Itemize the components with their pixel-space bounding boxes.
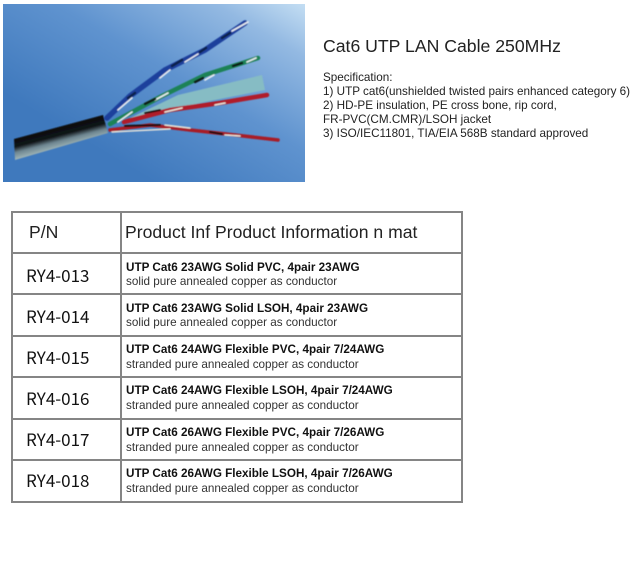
red pair upper: [124, 95, 267, 122]
row: RY4-016: UTP Cat6 24AWG Flexible LSOH, 4pair 7/24AWG: [126, 384, 393, 397]
row: RY4-014: solid pure annealed copper as conductor: [126, 316, 337, 329]
row: RY4-018: stranded pure annealed copper as conductor: [126, 482, 359, 495]
row: RY4-013: UTP Cat6 23AWG Solid PVC, 4pair 23AWG: [126, 261, 360, 274]
red pair lower: [110, 125, 278, 140]
specification text: 1) UTP cat6(unshielded twisted pairs enhanced category 6): [323, 85, 630, 98]
row: RY4-016: [26, 384, 393, 412]
row: RY4-018: UTP Cat6 26AWG Flexible LSOH, 4pair 7/26AWG: [126, 467, 393, 480]
specification text: 3) ISO/IEC11801, TIA/EIA 568B standard approved: [323, 127, 588, 140]
specification text: [323, 71, 630, 140]
row: RY4-017: RY4-017: [26, 426, 89, 451]
header: product information: Product Inf Product Information n mat: [125, 222, 417, 242]
specification text: Specification:: [323, 71, 393, 84]
teal separator band: [130, 75, 265, 118]
row: RY4-016: RY4-016: [26, 385, 89, 410]
row: RY4-014: [26, 302, 368, 329]
green pair: [110, 58, 258, 124]
row: RY4-015: [26, 343, 384, 371]
title: Cat6 UTP LAN Cable 250MHz: [323, 36, 561, 56]
header: P/N: P/N: [29, 222, 58, 242]
row: RY4-014: UTP Cat6 23AWG Solid LSOH, 4pair 23AWG: [126, 302, 368, 315]
row: RY4-018: [26, 467, 393, 495]
row: RY4-013: [26, 261, 360, 288]
photo: Cat6 cable on blue background: [3, 4, 305, 182]
specification text: 2) HD-PE insulation, PE cross bone, rip cord,: [323, 99, 557, 112]
row: RY4-015: UTP Cat6 24AWG Flexible PVC, 4pair 7/24AWG: [126, 343, 384, 356]
row: RY4-013: RY4-013: [26, 262, 89, 287]
row: RY4-014: RY4-014: [26, 303, 89, 328]
row: RY4-015: stranded pure annealed copper as conductor: [126, 358, 359, 371]
specification text: FR-PVC(CM.CMR)/LSOH jacket: [323, 113, 491, 126]
blue pair: [107, 22, 248, 118]
cable jacket: [14, 115, 108, 160]
row: RY4-013: solid pure annealed copper as conductor: [126, 275, 337, 288]
row: RY4-017: stranded pure annealed copper as conductor: [126, 441, 359, 454]
product table: [11, 211, 463, 503]
row: RY4-018: RY4-018: [26, 467, 89, 492]
row: RY4-015: RY4-015: [26, 344, 89, 369]
row: RY4-016: stranded pure annealed copper as conductor: [126, 399, 359, 412]
row: RY4-017: [26, 426, 384, 454]
row: RY4-017: UTP Cat6 26AWG Flexible PVC, 4pair 7/26AWG: [126, 426, 384, 439]
